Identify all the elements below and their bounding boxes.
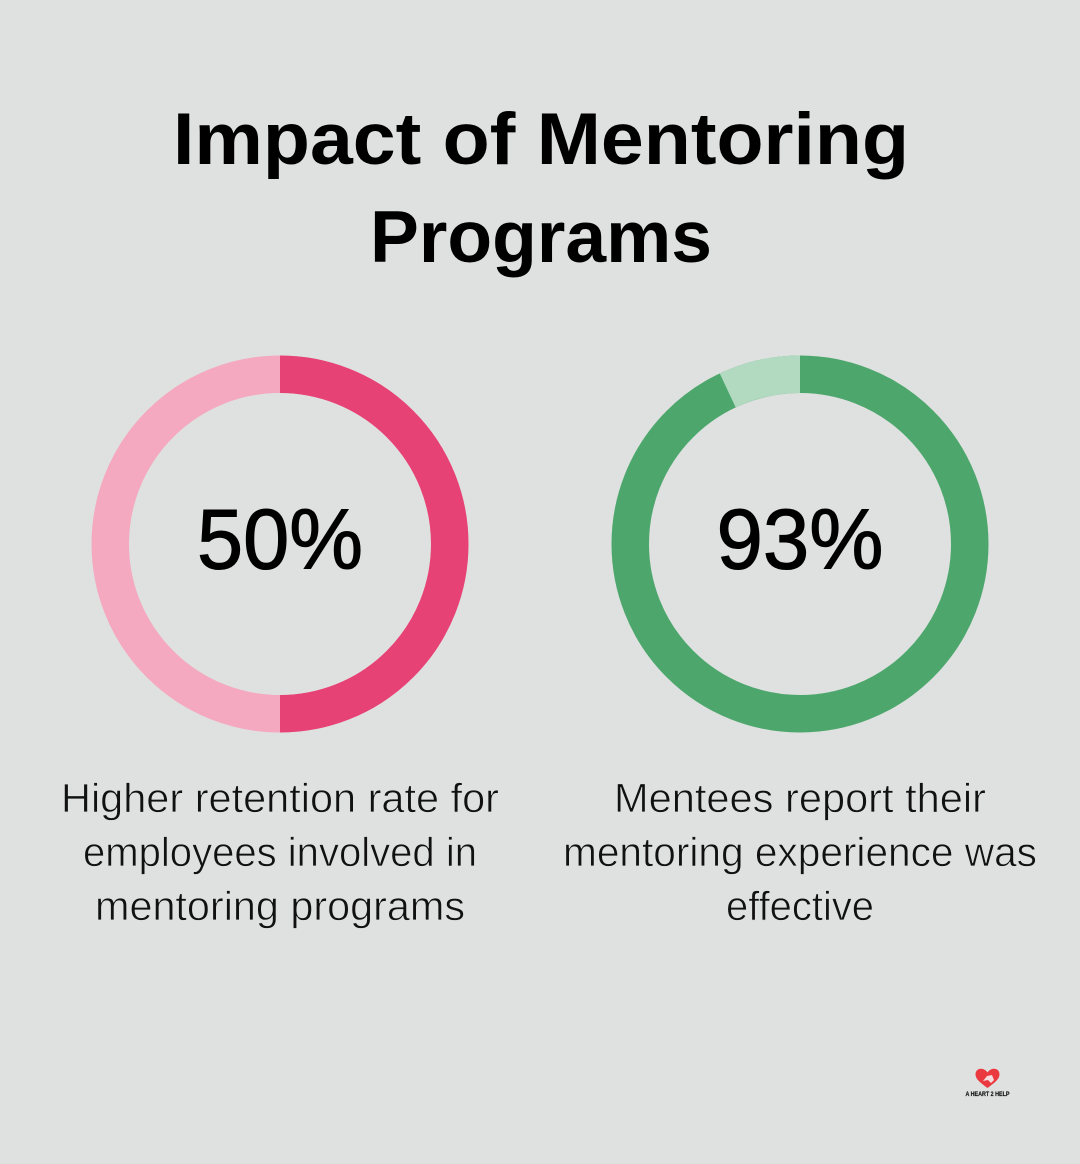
description: effectiveness: effective (726, 883, 874, 929)
stat value: 93%: 93% (716, 492, 884, 588)
description: retention: employees involved in (83, 829, 477, 875)
icon: heart (976, 1069, 1000, 1088)
title: Impact of Mentoring (173, 99, 909, 180)
title: Programs (370, 197, 712, 278)
donut chart: 93% (630, 374, 970, 714)
description: effectiveness: Mentees report their (614, 775, 986, 821)
description: effectiveness: mentoring experience was (563, 829, 1037, 875)
description: effectiveness (563, 775, 1037, 929)
icon: hands (983, 1075, 994, 1083)
logo: A Heart 2 Help (966, 1069, 1010, 1098)
stat value: 50%: 50% (197, 492, 363, 588)
description: retention: mentoring programs (95, 883, 465, 929)
logo text: A HEART 2 HELP (966, 1091, 1010, 1098)
description: retention (61, 775, 499, 929)
donut chart: 50% (110, 374, 450, 714)
description: retention: Higher retention rate for (61, 775, 499, 821)
panel: effectiveness stat (563, 374, 1037, 929)
panel: retention stat (61, 374, 499, 929)
title (173, 99, 909, 278)
